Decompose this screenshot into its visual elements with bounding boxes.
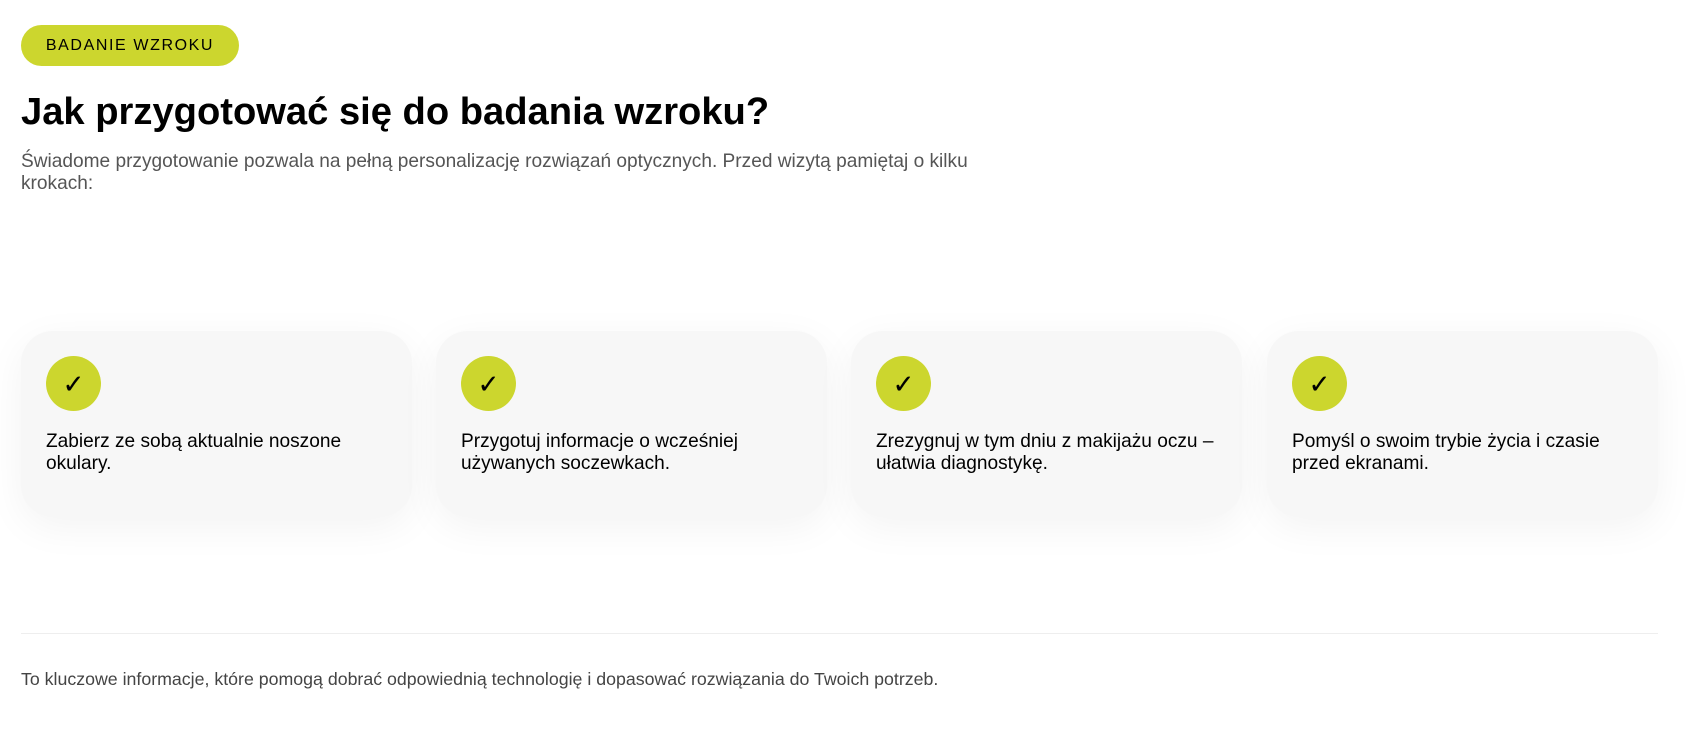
intro text: Świadome przygotowanie pozwala na pełną personalizację rozwiązań optycznych. Przed wizytą pamiętaj o kilku [21,151,968,172]
card 4 text [1292,431,1600,474]
card 1 text [46,431,341,474]
panel: card 2 [436,331,827,517]
card 1 text: Zabierz ze sobą aktualnie noszone [46,431,341,452]
badge: BADANIE WZROKU: BADANIE WZROKU [46,37,214,54]
title: Jak przygotować się do badania wzroku? [21,90,769,133]
intro text: krokach: [21,173,93,194]
panel: card 4 [1267,331,1658,517]
badge: BADANIE WZROKU [21,25,239,66]
icon: check circle 1: ✓ [63,370,84,400]
icon: check circle 2 [461,356,516,411]
icon: check circle 2: ✓ [478,370,499,400]
card 3 text: Zrezygnuj w tym dniu z makijażu oczu – [876,431,1213,452]
footer note: To kluczowe informacje, które pomogą dobrać odpowiednią technologię i dopasować rozwiązania do Twoich potrzeb. [21,669,938,689]
icon: check circle 3 [876,356,931,411]
card 2 text: Przygotuj informacje o wcześniej [461,431,738,452]
card 4 text: Pomyśl o swoim trybie życia i czasie [1292,431,1600,452]
icon: check circle 4 [1292,356,1347,411]
card 1 text: okulary. [46,453,111,474]
card 2 text [461,431,738,474]
intro text [21,149,968,194]
panel: card 3 [851,331,1242,517]
icon: check circle 1 [46,356,101,411]
icon: check circle 3: ✓ [893,370,914,400]
card 3 text: ułatwia diagnostykę. [876,453,1048,474]
panel: card 1 [21,331,412,517]
card 4 text: przed ekranami. [1292,453,1429,474]
icon: check circle 4: ✓ [1309,370,1330,400]
card 3 text [876,431,1214,474]
card 2 text: używanych soczewkach. [461,453,670,474]
